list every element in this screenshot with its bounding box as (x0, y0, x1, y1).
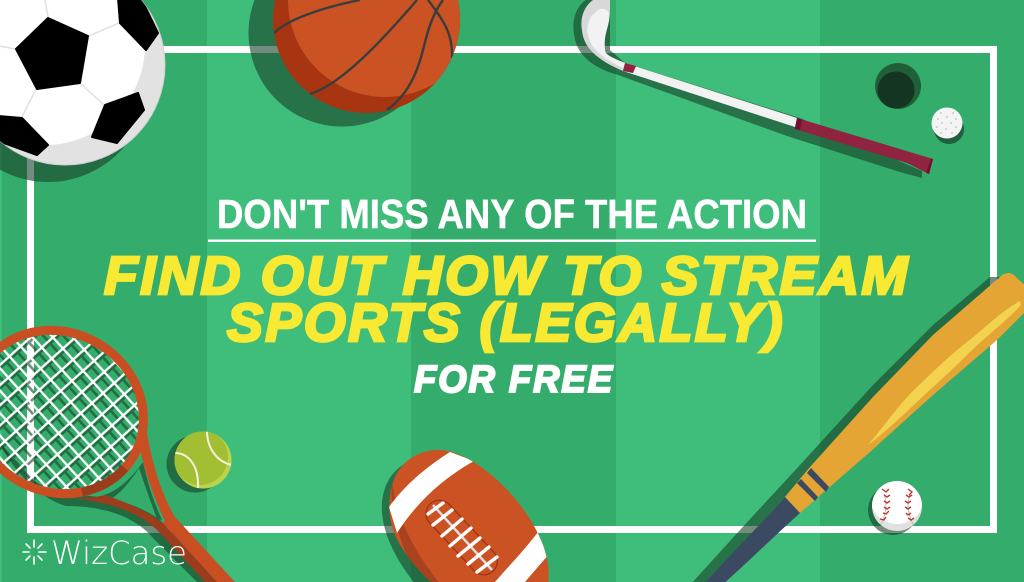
icon: tennis ball (166, 429, 232, 492)
club shadow (573, 0, 922, 178)
title: find out how to stream sports (legally): SPORTS (LEGALLY) (227, 293, 785, 353)
logo: WizCase: WizCase (51, 534, 187, 572)
icon: american football (382, 450, 550, 582)
title: find out how to stream sports (legally) (104, 246, 910, 353)
icon: baseball bat (690, 273, 1024, 582)
racket shadow (0, 440, 215, 582)
icon: golf ball (932, 108, 964, 144)
title: find out how to stream sports (legally): FIND OUT HOW TO STREAM (104, 246, 910, 306)
icon: baseball (868, 481, 922, 535)
icon: soccer ball (0, 0, 165, 182)
heading: don't miss any of the action: DON'T MISS ANY OF THE ACTION (217, 191, 807, 237)
icon: golf club (573, 0, 933, 178)
icon: tennis racket (0, 326, 235, 582)
icon: golf hole (875, 63, 921, 109)
racket throat and handle (138, 433, 235, 582)
icon: basketball (248, 0, 482, 126)
logo mark (23, 540, 46, 564)
subtitle: for free: FOR FREE (414, 359, 614, 401)
heading underline (208, 240, 816, 242)
white court frame (30, 50, 994, 530)
